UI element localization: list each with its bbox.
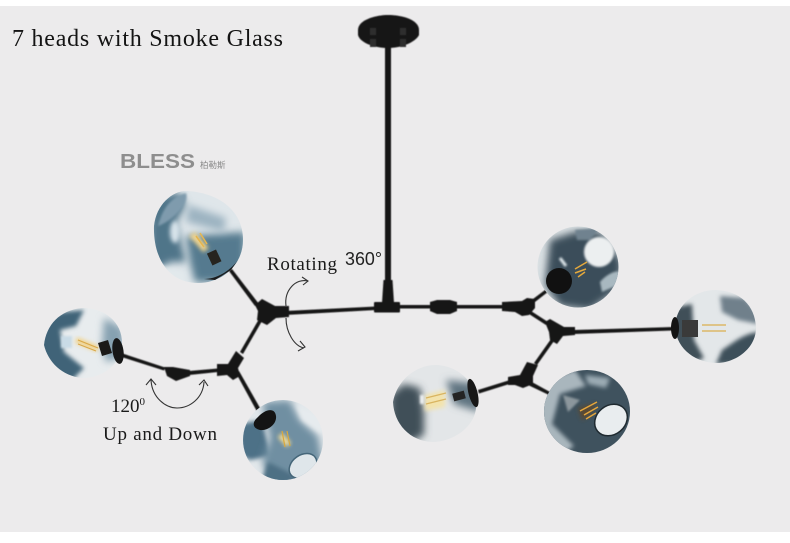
junction: mid right xyxy=(545,319,575,344)
socket cap xyxy=(465,378,481,408)
globe: top left xyxy=(154,191,243,283)
arm to top right globe xyxy=(533,287,551,302)
arrow: rotating xyxy=(286,277,308,351)
arm to lower left globe xyxy=(478,380,511,394)
globe: top right xyxy=(538,226,618,308)
center hub xyxy=(374,302,400,312)
globe: left xyxy=(44,308,124,378)
label: up and down: Up and Down xyxy=(103,424,218,445)
label: rotating: Rotating xyxy=(267,254,338,275)
arm to right globe xyxy=(574,327,673,334)
arm to left globe xyxy=(120,353,165,370)
arm to top left globe xyxy=(229,269,259,306)
vertical rod xyxy=(382,44,394,303)
chandelier frame xyxy=(120,15,673,417)
socket cap xyxy=(671,317,679,339)
globe: lower right xyxy=(544,370,630,453)
globe: lower xyxy=(243,400,323,480)
arrow: up and down xyxy=(146,379,208,408)
logo: BLESS: 柏勒斯 xyxy=(200,160,226,170)
globe: right xyxy=(671,290,756,363)
socket cap xyxy=(111,337,125,365)
arm: downward left xyxy=(240,319,262,354)
socket ball xyxy=(254,410,276,430)
arm to lower right globe xyxy=(528,381,550,395)
label: 120 degrees: 120 xyxy=(111,396,140,417)
label: 360 degrees: 360° xyxy=(345,249,382,269)
label: 120 degrees: 0 xyxy=(140,396,146,408)
junction: lower right xyxy=(508,362,538,388)
connector: right arm xyxy=(430,300,457,314)
title: 7 heads with Smoke Glass xyxy=(12,26,283,52)
connector: left arm xyxy=(164,367,190,381)
logo: BLESS: BLESS xyxy=(120,151,195,173)
arm to lower globe xyxy=(236,371,264,417)
arm left xyxy=(189,368,218,375)
socket ball xyxy=(546,268,572,294)
junction: upper right xyxy=(502,298,535,316)
ceiling canopy xyxy=(358,15,419,48)
arm: right branch xyxy=(529,311,548,325)
junction: lower left xyxy=(217,351,244,380)
main horizontal arm xyxy=(285,305,504,315)
globe: lower left xyxy=(393,365,479,442)
junction: upper left xyxy=(255,299,289,325)
arm: downward right xyxy=(534,339,554,365)
logo: BLESS xyxy=(120,151,226,173)
